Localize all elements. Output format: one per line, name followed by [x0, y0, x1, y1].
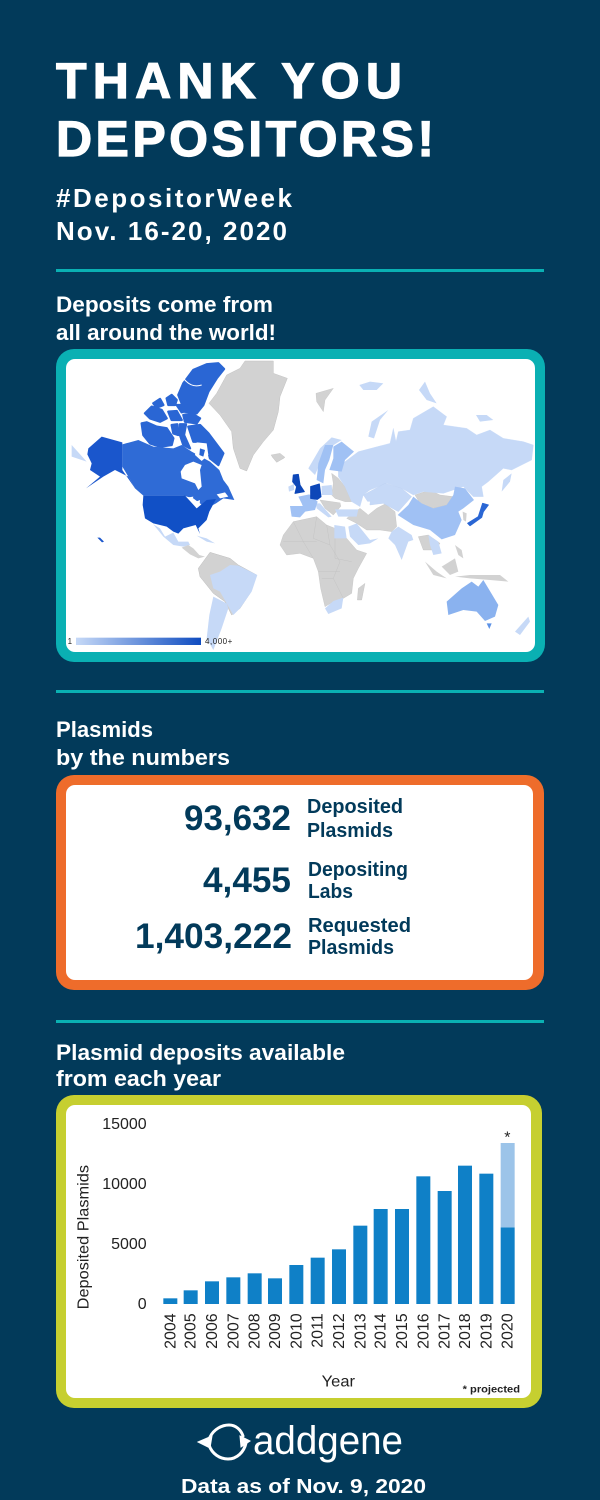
heading: plasmids by the numbers: by the numbers — [56, 745, 230, 770]
heading: plasmids by the numbers: Plasmids — [56, 717, 153, 742]
stat: requested plasmids: 1,403,222 — [135, 917, 292, 956]
x axis years — [162, 1313, 517, 1349]
heading: deposits per year: Plasmid deposits available — [56, 1040, 345, 1065]
subtitle: hashtag and dates: Nov. 16-20, 2020 — [56, 216, 287, 246]
stat: depositing labs: 4,455 — [203, 861, 291, 900]
x axis years: 2006 — [204, 1313, 221, 1349]
stat: deposited plasmids: 93,632 — [184, 799, 291, 838]
title: THANK YOU — [56, 53, 402, 109]
x axis years: 2013 — [352, 1313, 369, 1349]
logo: addgene: addgene — [253, 1419, 403, 1463]
heading: deposits per year: from each year — [56, 1066, 221, 1091]
heading: deposits world: all around the world! — [56, 320, 276, 345]
legend: colour scale: 1 — [68, 637, 73, 646]
stat: depositing labs — [203, 859, 408, 903]
stat: depositing labs: Labs — [308, 881, 353, 903]
stat: deposited plasmids: Plasmids — [307, 820, 393, 842]
y axis title: Deposited Plasmids — [75, 1165, 92, 1309]
title — [56, 53, 434, 167]
x axis years: 2018 — [457, 1313, 474, 1349]
x axis years: 2004 — [162, 1313, 179, 1349]
x axis years: 2007 — [225, 1313, 242, 1349]
x axis years: 2008 — [247, 1313, 264, 1349]
projected marker: * — [504, 1130, 510, 1147]
legend: colour scale — [68, 637, 233, 646]
heading: deposits world: Deposits come from — [56, 292, 273, 317]
x axis years: 2010 — [288, 1313, 305, 1349]
y axis labels — [102, 1116, 147, 1313]
north america and greenland — [72, 361, 287, 508]
subtitle: hashtag and dates: #DepositorWeek — [56, 183, 293, 213]
y axis labels: 15000 — [102, 1116, 147, 1133]
usa — [143, 496, 216, 534]
subtitle: hashtag and dates — [56, 183, 293, 246]
africa — [280, 517, 367, 607]
x axis years: 2017 — [437, 1313, 454, 1349]
eurasia — [271, 382, 533, 560]
heading: deposits per year — [56, 1040, 345, 1091]
x axis years: 2020 — [500, 1313, 517, 1349]
x axis years: 2011 — [310, 1313, 327, 1348]
x axis title: Year — [322, 1374, 356, 1391]
asia pacific and oceania — [425, 545, 508, 582]
note: projected: * projected — [463, 1385, 520, 1396]
icon: circular arrows — [198, 1425, 250, 1459]
latin america — [153, 524, 190, 547]
panel: numbers — [56, 775, 544, 990]
stat: requested plasmids: Requested — [308, 915, 411, 937]
legend: colour scale: 4,000+ — [205, 637, 233, 646]
panel: bar chart — [56, 1095, 542, 1408]
heading: deposits world — [56, 292, 276, 345]
stat: requested plasmids — [135, 915, 411, 959]
map: deposits by country — [68, 361, 533, 650]
footer: data date: Data as of Nov. 9, 2020 — [181, 1476, 426, 1498]
x axis years: 2015 — [394, 1313, 411, 1349]
stat: deposited plasmids: Deposited — [307, 796, 403, 818]
heading: plasmids by the numbers — [56, 717, 230, 770]
y axis labels: 5000 — [111, 1236, 147, 1253]
x axis years: 2009 — [267, 1313, 284, 1349]
x axis years: 2016 — [415, 1313, 432, 1349]
title: DEPOSITORS! — [56, 111, 434, 167]
x axis years: 2014 — [373, 1313, 390, 1349]
x axis years: 2019 — [478, 1313, 495, 1349]
x axis years: 2005 — [183, 1313, 200, 1349]
bars — [163, 1143, 515, 1304]
stat: depositing labs: Depositing — [308, 859, 408, 881]
stat: requested plasmids: Plasmids — [308, 937, 394, 959]
panel: world map — [56, 349, 545, 662]
bar chart — [75, 1116, 520, 1396]
y axis labels: 0 — [138, 1296, 147, 1313]
stat: deposited plasmids — [184, 796, 403, 842]
y axis labels: 10000 — [102, 1176, 147, 1193]
x axis years: 2012 — [331, 1313, 348, 1349]
